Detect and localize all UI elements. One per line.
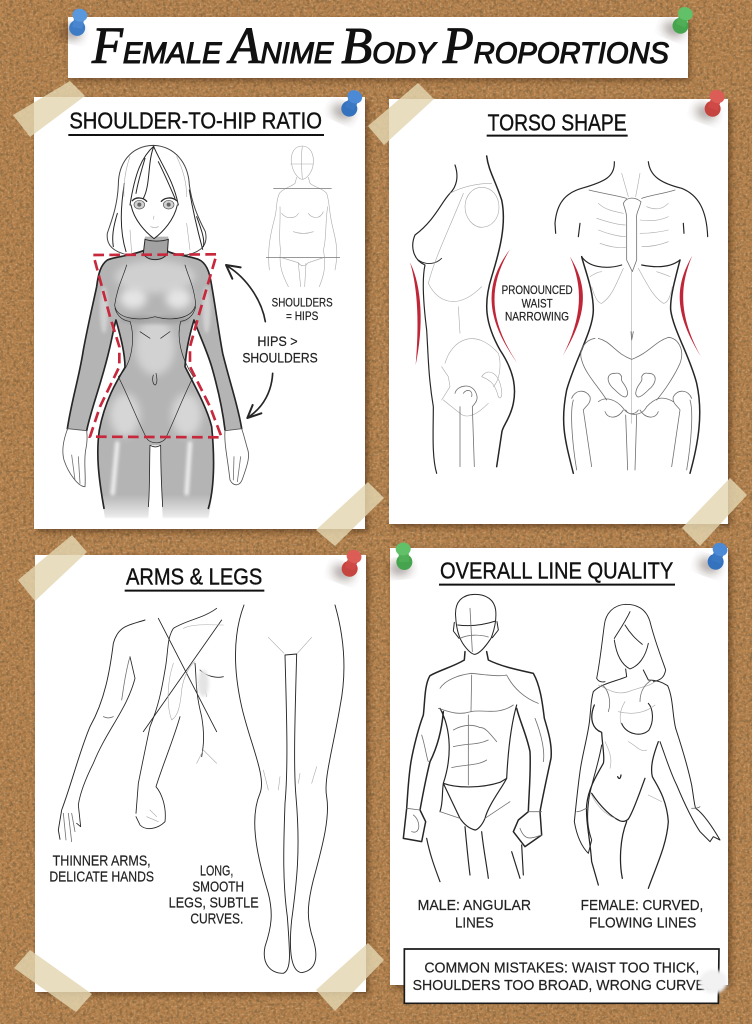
red waist markers [410,249,701,365]
label: shoulders = hips: = HIPS [286,309,318,323]
label: thinner arms, delicate hands: THINNER ARMS, [53,853,151,869]
label: female curved flowing lines [581,898,703,932]
left arm sketch [58,620,145,842]
heading: torso shape: TORSO SHAPE [488,110,627,136]
panel: torso shape [389,99,731,527]
pin: blue, shoulder panel [329,84,365,124]
label: female curved flowing lines: FLOWING LINES [589,916,697,932]
label: pronounced waist narrowing: PRONOUNCED [502,283,573,297]
label: thinner arms, delicate hands: DELICATE HANDS [49,869,154,885]
pin: red, arms panel [330,545,364,584]
side view torso [413,156,515,473]
female figure [574,604,720,888]
eyes and mouth [132,198,177,227]
panel: shoulder-to-hip ratio [34,97,368,532]
label: long, smooth legs, subtle curves [169,864,259,927]
pin: red, torso panel [693,85,727,124]
label: hips > shoulders: SHOULDERS [242,349,318,365]
red dashed shoulder-hip trapezoid [90,254,222,437]
title banner [68,17,690,81]
heading: overall line quality: OVERALL LINE QUALITY [440,557,673,583]
body outline [67,251,242,508]
heading: shoulder-to-hip ratio: SHOULDER-TO-HIP RATIO [69,107,322,133]
label: shoulders = hips: SHOULDERS [272,296,333,310]
front view torso [555,162,708,473]
label: pronounced waist narrowing: NARROWING [505,310,569,324]
label: male angular lines: MALE: ANGULAR [418,898,531,914]
neck and collar [143,239,168,260]
label: male angular lines: LINES [455,916,494,932]
callout: common mistakes: SHOULDERS TOO BROAD, WRONG CURVES [413,978,715,994]
label: male angular lines [418,898,531,932]
hair strands [113,146,204,252]
bodysuit seam lines [115,265,196,443]
legs sketch [235,605,344,973]
callout: common mistakes [404,949,727,1003]
hands [63,429,249,487]
label: female curved flowing lines: FEMALE: CURVED, [581,898,703,914]
panel: overall line quality [390,548,731,1003]
heading: arms and legs: ARMS & LEGS [126,563,262,589]
arrow: to hips [247,373,273,418]
small reference figure [266,146,340,287]
arrow: to shoulders [226,265,265,322]
panel: arms and legs [35,555,369,995]
label: pronounced waist narrowing: WAIST [522,296,553,310]
label: long, smooth legs, subtle curves: LONG, [200,864,233,880]
label: pronounced waist narrowing [502,283,573,324]
pin: blue, title left [59,6,89,42]
label: thinner arms, delicate hands [49,853,154,885]
pin: green, title right [661,2,695,41]
label: long, smooth legs, subtle curves: SMOOTH [192,879,244,895]
right arm sketch [136,608,223,829]
pin: green, line quality panel [387,542,413,576]
title: FEMALE ANIME BODY PROPORTIONS [91,18,669,75]
main anime figure [63,145,249,518]
label: shoulders = hips [272,296,333,323]
label: long, smooth legs, subtle curves: LEGS, SUBTLE [169,895,259,911]
callout: common mistakes: COMMON MISTAKES: WAIST TOO THICK, [424,960,699,976]
body shading [100,260,211,493]
face [130,175,178,238]
pin: blue, line quality panel [696,538,730,577]
label: hips > shoulders [242,333,318,365]
male figure [403,594,551,882]
label: hips > shoulders: HIPS > [257,333,298,349]
label: long, smooth legs, subtle curves: CURVES. [190,911,243,927]
